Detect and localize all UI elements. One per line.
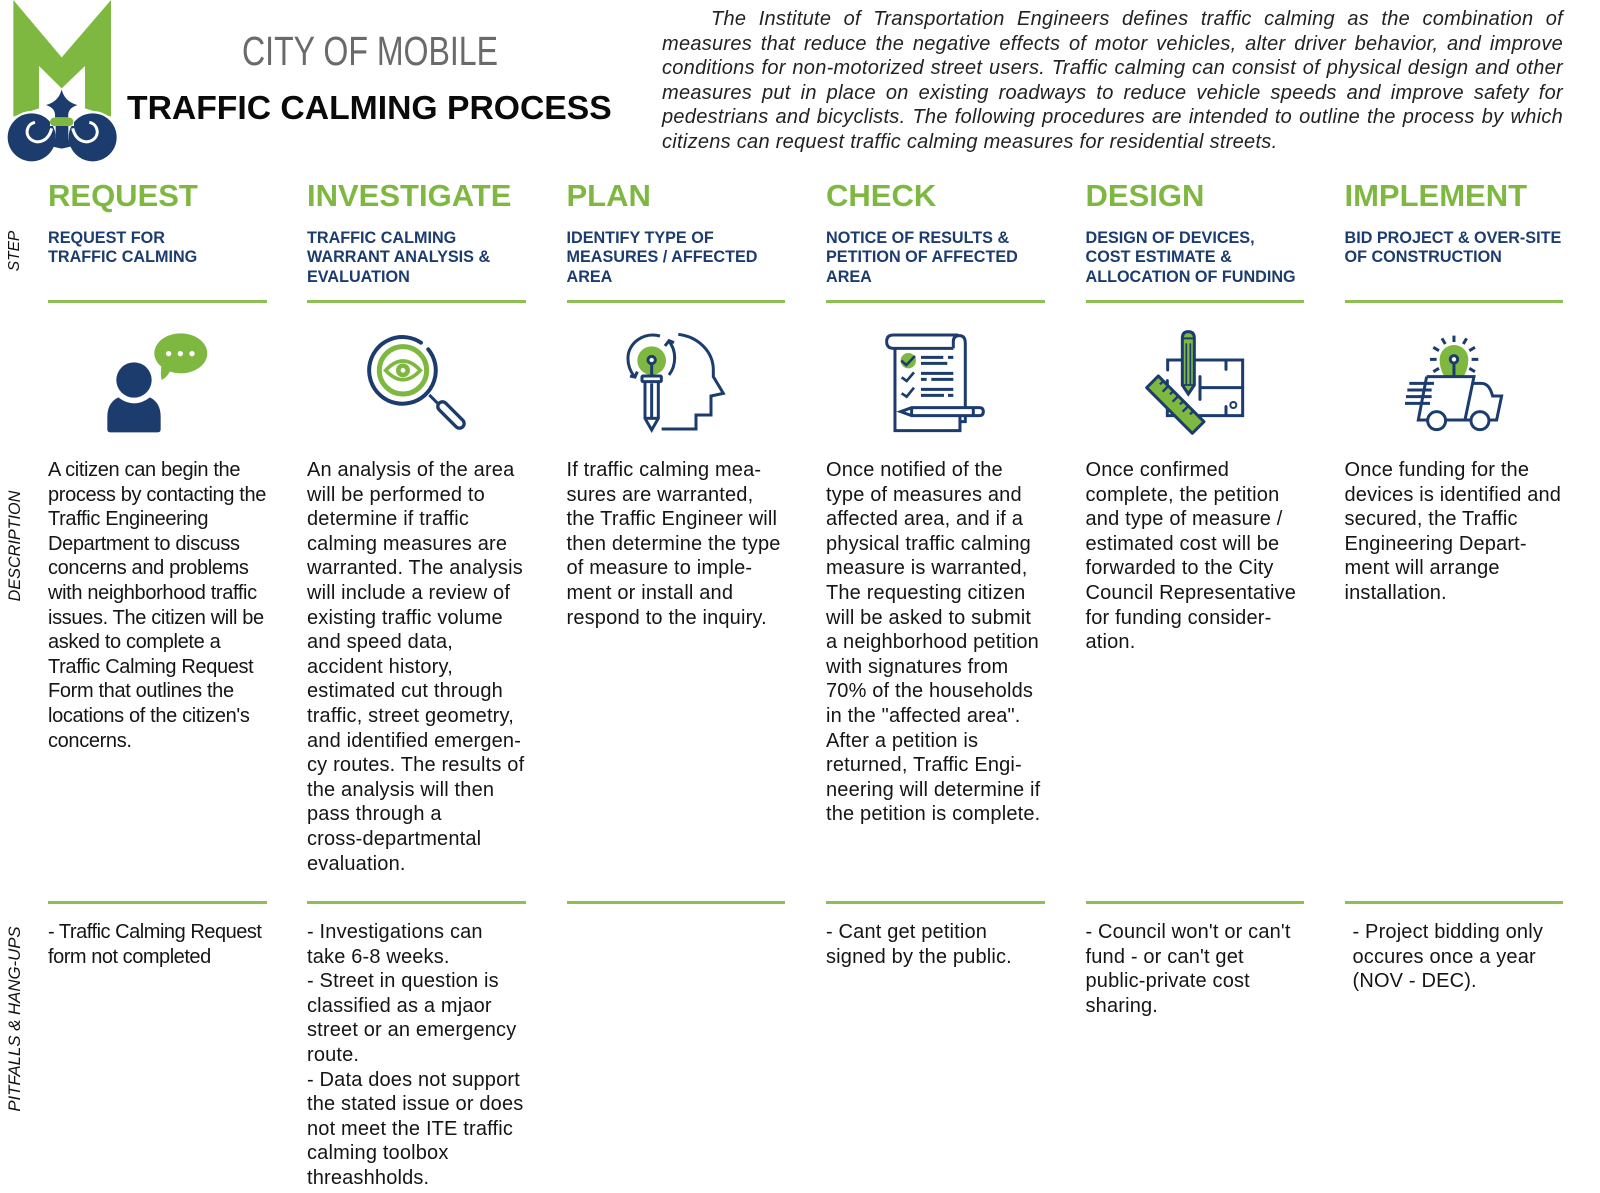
description: implement: installation. <box>1344 582 1447 604</box>
description: investigate: and speed data, <box>307 631 453 653</box>
description: check: The requesting citizen <box>826 582 1025 604</box>
title: City of Mobile: CITY OF MOBILE <box>242 28 498 74</box>
icon: blueprint with pencil and ruler <box>1145 330 1244 435</box>
icon: head with idea pencil <box>626 332 726 433</box>
intro paragraph: The Institute of Transportation Engineers defines traffic calming as the combination of <box>711 8 1563 30</box>
description: investigate: pass through a <box>307 803 442 825</box>
pitfalls: investigate: take 6-8 weeks. <box>307 946 450 968</box>
description: check: physical traffic calming <box>826 533 1031 555</box>
description: investigate: will include a review of <box>307 582 510 604</box>
description: implement: Engineering Depart- <box>1344 533 1527 555</box>
description: check: measure is warranted, <box>826 557 1027 579</box>
description: request: issues. The citizen will be <box>48 607 264 629</box>
description: design: forwarded to the City <box>1086 557 1274 579</box>
pitfalls: investigate: threashholds. <box>307 1167 429 1189</box>
description: investigate: and identified emergen- <box>307 730 521 752</box>
pitfalls: request: form not completed <box>48 946 211 968</box>
description: check: Once notified of the <box>826 459 1003 481</box>
description: check: After a petition is <box>826 730 978 752</box>
description: plan <box>566 459 781 629</box>
description: request: locations of the citizen's <box>48 705 250 727</box>
description: implement: secured, the Traffic <box>1344 508 1518 530</box>
step summary: check: PETITION OF AFFECTED <box>826 248 1018 266</box>
description: request: concerns. <box>48 730 132 752</box>
pitfalls: design <box>1086 921 1291 1017</box>
description: request: A citizen can begin the <box>48 459 240 481</box>
step summary: request: TRAFFIC CALMING <box>48 248 197 266</box>
description: check: affected area, and if a <box>826 508 1023 530</box>
step summary: design: DESIGN OF DEVICES, <box>1086 229 1255 247</box>
description: request: with neighborhood traffic <box>48 582 257 604</box>
step summary: implement: OF CONSTRUCTION <box>1344 248 1502 266</box>
description: check: the petition is complete. <box>826 803 1040 825</box>
icon: delivery truck with light bulb <box>1404 336 1504 432</box>
step summary: investigate: EVALUATION <box>307 268 410 286</box>
description: investigate: warranted. The analysis <box>307 557 523 579</box>
description: check: 70% of the households <box>826 680 1033 702</box>
pitfalls: investigate <box>307 921 523 1189</box>
description: plan: of measure to imple- <box>566 557 752 579</box>
pitfalls: investigate: street or an emergency <box>307 1019 516 1041</box>
description: plan: ment or install and <box>566 582 733 604</box>
description: request: process by contacting the <box>48 484 266 506</box>
pitfalls: implement: (NOV - DEC). <box>1352 970 1477 992</box>
pitfalls: implement: occures once a year <box>1352 946 1536 968</box>
pitfalls: design: public-private cost <box>1086 970 1250 992</box>
description: request: asked to complete a <box>48 631 220 653</box>
intro paragraph: citizens can request traffic calming measures for residential streets. <box>662 131 1277 153</box>
description: design: ation. <box>1086 631 1135 653</box>
icon: citizen with speech bubble <box>107 333 208 432</box>
pitfalls: implement <box>1352 921 1543 992</box>
description: implement: devices is identified and <box>1344 484 1561 506</box>
description: investigate: will be performed to <box>307 484 485 506</box>
step summary: plan: MEASURES / AFFECTED <box>566 248 757 266</box>
description: request: Traffic Calming Request <box>48 656 253 678</box>
pitfalls: check: signed by the public. <box>826 946 1012 968</box>
description: investigate: traffic, street geometry, <box>307 705 514 727</box>
step summary: plan: AREA <box>566 268 612 286</box>
step heading: implement: IMPLEMENT <box>1344 178 1527 213</box>
description: plan: respond to the inquiry. <box>566 607 767 629</box>
description: design <box>1086 459 1296 653</box>
intro paragraph: pedestrians and bicyclists. The following procedures are intended to outline the process by which <box>662 106 1563 128</box>
description: plan: the Traffic Engineer will <box>566 508 777 530</box>
description: investigate: cy routes. The results of <box>307 754 524 776</box>
pitfalls: check: - Cant get petition <box>826 921 987 943</box>
description: design: and type of measure / <box>1086 508 1283 530</box>
step summary: design: ALLOCATION OF FUNDING <box>1086 268 1296 286</box>
pitfalls: design: fund - or can't get <box>1086 946 1244 968</box>
description: investigate: existing traffic volume <box>307 607 503 629</box>
step heading: check: CHECK <box>826 178 936 213</box>
description: request: Form that outlines the <box>48 680 234 702</box>
pitfalls: investigate: not meet the ITE traffic <box>307 1118 513 1140</box>
description: plan: sures are warranted, <box>566 484 753 506</box>
step heading: plan: PLAN <box>566 178 651 213</box>
intro paragraph: measures that reduce the negative effects of motor vehicles, alter driver behavior, and improve <box>662 33 1563 55</box>
description: design: complete, the petition <box>1086 484 1279 506</box>
description: investigate: An analysis of the area <box>307 459 514 481</box>
step summary: check: NOTICE OF RESULTS & <box>826 229 1009 247</box>
logo: City of Mobile M <box>8 0 117 162</box>
pitfalls: investigate: - Data does not support <box>307 1069 520 1091</box>
description: plan: If traffic calming mea- <box>566 459 761 481</box>
description: check: neering will determine if <box>826 779 1040 801</box>
pitfalls: design: sharing. <box>1086 995 1158 1017</box>
step summary: check: AREA <box>826 268 872 286</box>
description: check: type of measures and <box>826 484 1022 506</box>
description: check <box>826 459 1040 825</box>
description: plan: then determine the type <box>566 533 781 555</box>
description: design: Council Representative <box>1086 582 1296 604</box>
pitfalls: investigate: - Street in question is <box>307 970 499 992</box>
title: Traffic Calming Process: TRAFFIC CALMING PROCESS <box>127 89 612 127</box>
pitfalls: implement: - Project bidding only <box>1352 921 1543 943</box>
description: investigate: evaluation. <box>307 852 406 874</box>
description: request: concerns and problems <box>48 557 249 579</box>
step summary: design: COST ESTIMATE & <box>1086 248 1232 266</box>
description: design: Once confirmed <box>1086 459 1229 481</box>
step summary: investigate: WARRANT ANALYSIS & <box>307 248 490 266</box>
description: check: in the "affected area". <box>826 705 1021 727</box>
pitfalls: investigate: the stated issue or does <box>307 1093 523 1115</box>
description: design: estimated cost will be <box>1086 533 1279 555</box>
pitfalls: request <box>48 921 262 968</box>
description: check: a neighborhood petition <box>826 631 1039 653</box>
step summary: request: REQUEST FOR <box>48 229 165 247</box>
step heading: design: DESIGN <box>1086 178 1204 213</box>
description: investigate <box>307 459 524 874</box>
step summary: design <box>1086 229 1296 286</box>
step summary: check <box>826 229 1018 286</box>
description: check: will be asked to submit <box>826 607 1031 629</box>
pitfalls: investigate: classified as a mjaor <box>307 995 492 1017</box>
pitfalls: investigate: route. <box>307 1044 359 1066</box>
row label: pitfalls and hang-ups: PITFALLS & HANG-UPS <box>5 926 24 1112</box>
description: investigate: estimated cut through <box>307 680 503 702</box>
description: request <box>48 459 266 752</box>
pitfalls: design: - Council won't or can't <box>1086 921 1291 943</box>
description: design: for funding consider- <box>1086 607 1271 629</box>
description: check: returned, Traffic Engi- <box>826 754 1022 776</box>
description: request: Traffic Engineering <box>48 508 208 530</box>
description: investigate: calming measures are <box>307 533 507 555</box>
description: implement: ment will arrange <box>1344 557 1500 579</box>
pitfalls: investigate: calming toolbox <box>307 1142 449 1164</box>
description: investigate: cross-departmental <box>307 828 481 850</box>
pitfalls: check <box>826 921 1012 968</box>
icon: checklist document with pencil <box>885 334 985 432</box>
step summary: plan <box>566 229 757 286</box>
pitfalls: investigate: - Investigations can <box>307 921 483 943</box>
icon: magnifying glass with eye <box>367 335 466 430</box>
step summary: request <box>48 229 197 266</box>
intro paragraph <box>662 8 1564 153</box>
intro paragraph: conditions for non-motorized street users. Traffic calming can consist of physical design and other <box>662 57 1563 79</box>
step summary: investigate: TRAFFIC CALMING <box>307 229 456 247</box>
description: investigate: determine if traffic <box>307 508 469 530</box>
description: investigate: the analysis will then <box>307 779 494 801</box>
description: implement: Once funding for the <box>1344 459 1529 481</box>
step summary: implement <box>1344 229 1561 266</box>
description: implement <box>1344 459 1561 604</box>
pitfalls: request: - Traffic Calming Request <box>48 921 262 943</box>
description: request: Department to discuss <box>48 533 240 555</box>
step summary: implement: BID PROJECT & OVER-SITE <box>1344 229 1561 247</box>
description: check: with signatures from <box>826 656 1008 678</box>
intro paragraph: measures put in place on existing roadways to reduce vehicle speeds and improve safety for <box>662 82 1563 104</box>
description: investigate: accident history, <box>307 656 453 678</box>
row label: description: DESCRIPTION <box>6 491 24 601</box>
step summary: plan: IDENTIFY TYPE OF <box>566 229 714 247</box>
step heading: investigate: INVESTIGATE <box>307 178 511 213</box>
step heading: request: REQUEST <box>48 178 198 213</box>
row label: step: STEP <box>6 231 23 271</box>
step summary: investigate <box>307 229 490 286</box>
